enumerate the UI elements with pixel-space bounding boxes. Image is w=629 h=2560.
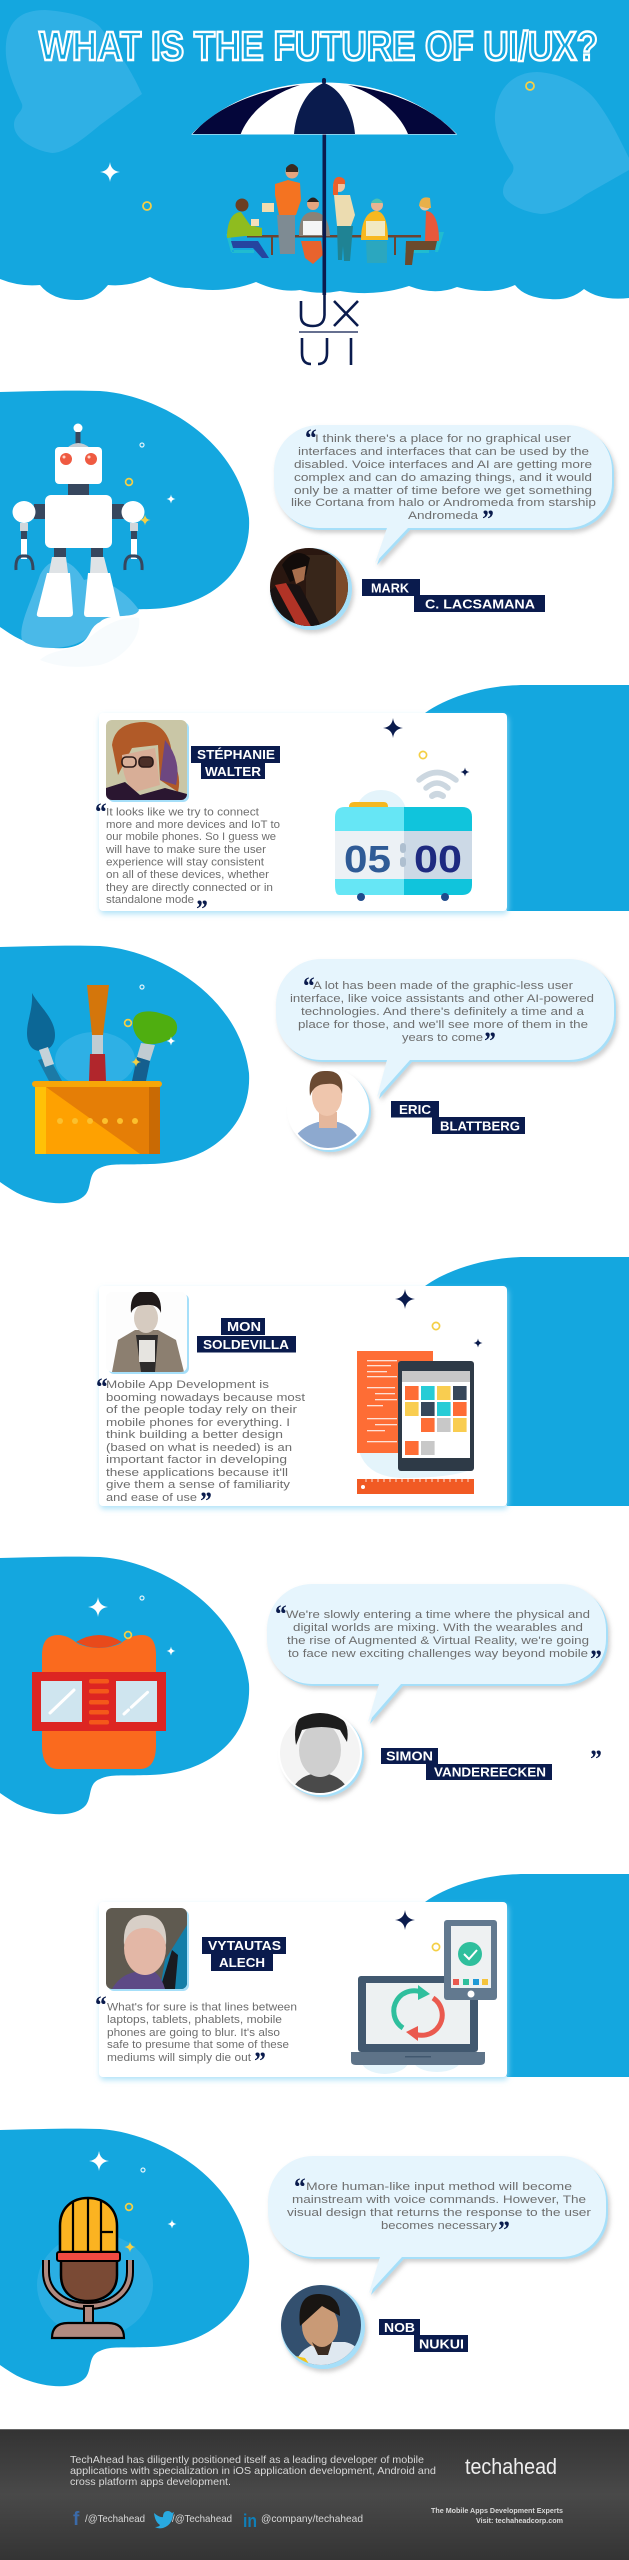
quote text: Mobile App Development is bbox=[106, 1379, 269, 1391]
name tag: NUKUI bbox=[419, 2336, 464, 2352]
quote text: What's for sure is that lines between bbox=[107, 2002, 297, 2014]
icon: alarm clock with wifi bbox=[335, 772, 472, 901]
quote text bbox=[95, 1374, 306, 1515]
icon: brushes in box bbox=[27, 985, 177, 1154]
portrait bbox=[281, 2285, 365, 2369]
name tag bbox=[191, 746, 280, 779]
logo: techahead: techahead bbox=[465, 2454, 557, 2479]
backdrop blob with light patch bbox=[0, 391, 249, 667]
person in red top bbox=[405, 197, 439, 265]
portrait bbox=[278, 1711, 364, 1797]
stray quote mark: ” bbox=[589, 1746, 602, 1773]
quote text: More human-like input method will become bbox=[306, 2181, 572, 2193]
quote text: experience will stay consistent bbox=[106, 856, 265, 868]
quote text: I think there's a place for no graphical user bbox=[315, 433, 571, 445]
name tag bbox=[197, 1318, 296, 1352]
person in yellow hoodie bbox=[361, 198, 388, 263]
quote text: will have to make sure the user bbox=[105, 844, 266, 856]
quote text: “ bbox=[302, 973, 315, 1000]
about text: applications with specialization in iOS application development, Android and bbox=[70, 2466, 436, 2477]
icon: umbrella bbox=[192, 78, 456, 295]
quote text: years to come bbox=[402, 1032, 483, 1044]
name tag bbox=[379, 2319, 468, 2352]
person at laptop bbox=[299, 198, 330, 264]
quote text: becomes necessary bbox=[381, 2220, 497, 2232]
name tag: C. LACSAMANA bbox=[425, 596, 536, 612]
quote text bbox=[291, 425, 596, 533]
panel: Vytautas Alech bbox=[94, 1874, 629, 2077]
person in orange standing bbox=[262, 164, 301, 254]
quote text: place for those, and we'll see more of them in the bbox=[298, 1019, 588, 1031]
quote text: give them a sense of familiarity bbox=[106, 1479, 290, 1491]
icon: laptop and phone sync bbox=[351, 1920, 497, 2074]
portrait bbox=[106, 1908, 189, 1991]
quote text: of the people today rely on their bbox=[106, 1404, 297, 1416]
quote text: interfaces and interfaces that can be used by the bbox=[298, 446, 589, 458]
icon: linkedin: in bbox=[243, 2511, 257, 2531]
person with red hair bbox=[333, 177, 355, 261]
quote text: to face new exciting challenges way beyond mobile bbox=[288, 1648, 588, 1660]
quote text: our mobile phones. So I guess we bbox=[106, 831, 276, 843]
icon: view-master headset bbox=[32, 1635, 166, 1769]
name tag: ALECH bbox=[219, 1955, 265, 1970]
quote text: on all of these devices, whether bbox=[106, 869, 269, 881]
backdrop bbox=[425, 1874, 629, 2077]
quote text: (based on what is needed) is an bbox=[106, 1442, 292, 1454]
portrait bbox=[268, 546, 352, 630]
quote text: and ease of use bbox=[106, 1492, 197, 1504]
card bbox=[99, 1902, 507, 2077]
quote text: standalone mode bbox=[106, 894, 194, 906]
quote text: ” bbox=[199, 1488, 212, 1515]
about text: TechAhead has diligently positioned itself as a leading developer of mobile bbox=[70, 2455, 424, 2466]
name tag bbox=[202, 1937, 286, 1971]
quote text: they are directly connected or in bbox=[106, 882, 273, 894]
quote text: think building a better design bbox=[106, 1429, 283, 1441]
quote text: complex and can do amazing things, and it would bbox=[294, 472, 592, 484]
name tag: NOB bbox=[384, 2320, 415, 2335]
quote text: phones are going to blur. It's also bbox=[107, 2027, 280, 2039]
speech bubble bbox=[274, 425, 614, 565]
name tag bbox=[391, 1101, 525, 1134]
quote text: “ bbox=[274, 1601, 287, 1628]
quote text: visual design that returns the response to the user bbox=[287, 2207, 591, 2219]
quote text: laptops, tablets, phablets, mobile bbox=[107, 2014, 282, 2026]
quote text: the rise of Augmented & Virtual Reality, we're going bbox=[287, 1635, 589, 1647]
quote text: digital worlds are mixing. With the wearables and bbox=[293, 1622, 583, 1634]
name tag: SIMON bbox=[386, 1748, 433, 1764]
icon: sparkles bbox=[395, 1289, 482, 1348]
name tag: STÉPHANIE bbox=[197, 747, 275, 762]
quote text bbox=[274, 1601, 602, 1673]
panel: Stéphanie Walter bbox=[94, 685, 629, 923]
about text: cross platform apps development. bbox=[70, 2477, 231, 2488]
icon: sparkles bbox=[89, 2151, 176, 2252]
quote text: ” bbox=[497, 2217, 510, 2244]
name tag: VANDEREECKEN bbox=[434, 1764, 546, 1780]
about text bbox=[70, 2455, 436, 2488]
social links: /@Techahead bbox=[172, 2514, 232, 2525]
quote text: important factor in developing bbox=[106, 1454, 287, 1466]
name tag: MON bbox=[227, 1319, 261, 1334]
quote text: only be a matter of time before we get something bbox=[294, 485, 592, 497]
speech bubble bbox=[276, 959, 616, 1099]
quote text: “ bbox=[304, 425, 317, 452]
quote text: disabled. Voice interfaces and AI are getting more bbox=[294, 459, 592, 471]
tagline: Visit: techaheadcorp.com bbox=[476, 2516, 563, 2525]
name tag: BLATTBERG bbox=[440, 1118, 520, 1134]
quote text: mainstream with voice commands. However, The bbox=[292, 2194, 586, 2206]
name tag: WALTER bbox=[205, 764, 262, 779]
header background with cloud edge bbox=[0, 0, 629, 300]
panel: Nob Nukui bbox=[0, 2129, 608, 2386]
quote text: A lot has been made of the graphic-less user bbox=[313, 980, 573, 992]
portrait bbox=[287, 1068, 371, 1152]
quote text: these applications because it'll bbox=[106, 1467, 288, 1479]
quote text bbox=[94, 1992, 297, 2075]
quote text: “ bbox=[95, 1374, 108, 1401]
panel: Mon Soldevilla bbox=[95, 1257, 629, 1515]
quote text: booming nowadays because most bbox=[106, 1392, 306, 1404]
panel: Mark C. Lacsamana bbox=[0, 391, 614, 667]
quote text bbox=[94, 799, 280, 923]
quote text: more and more devices and IoT to bbox=[106, 819, 280, 831]
quote text: mobile phones for everything. I bbox=[106, 1417, 290, 1429]
quote text bbox=[290, 973, 594, 1055]
quote text: ” bbox=[253, 2048, 266, 2075]
icon: facebook: f bbox=[73, 2509, 80, 2530]
quote text: We're slowly entering a time where the physical and bbox=[286, 1609, 590, 1621]
quote text: ” bbox=[481, 506, 494, 533]
icon: sparkles bbox=[383, 718, 470, 776]
name tag: ERIC bbox=[399, 1102, 432, 1117]
icon: alarm clock with wifi: 00 bbox=[414, 839, 462, 881]
quote text: mediums will simply die out bbox=[107, 2052, 252, 2064]
portrait bbox=[106, 1291, 189, 1374]
icon: sparkles bbox=[126, 443, 176, 526]
backdrop blob bbox=[0, 1557, 249, 1814]
tagline bbox=[431, 2506, 563, 2525]
backdrop blob bbox=[0, 946, 249, 1203]
quote text: ” bbox=[589, 1646, 602, 1673]
name tag: MARK bbox=[371, 580, 410, 596]
quote text: like Cortana from halo or Andromeda from starship bbox=[291, 497, 596, 509]
icon: robot bbox=[12, 424, 144, 617]
name tag: SOLDEVILLA bbox=[203, 1337, 290, 1352]
quote text: It looks like we try to connect bbox=[106, 806, 260, 818]
icon: code sheet and tablet bbox=[357, 1351, 474, 1494]
icon: header sparkles and rings bbox=[100, 82, 534, 210]
icon: microphone bbox=[37, 2198, 153, 2338]
icon: alarm clock with wifi: 05 bbox=[344, 839, 391, 881]
quote text: ” bbox=[195, 896, 208, 923]
tagline: The Mobile Apps Development Experts bbox=[431, 2506, 563, 2515]
social links: /@Techahead bbox=[85, 2514, 145, 2525]
footer bbox=[0, 2429, 629, 2560]
name tag bbox=[362, 579, 545, 612]
social links: @company/techahead bbox=[261, 2514, 363, 2525]
icon: sparkles bbox=[395, 1910, 440, 1951]
logo: UX over UI bbox=[299, 290, 358, 365]
quote text: interface, like voice assistants and other AI-powered bbox=[290, 993, 594, 1005]
quote text bbox=[287, 2174, 591, 2244]
illustration: team working at table bbox=[226, 164, 444, 265]
name tag bbox=[381, 1748, 552, 1780]
decorative header blobs bbox=[6, 10, 629, 214]
backdrop bbox=[425, 1257, 629, 1506]
backdrop blob bbox=[0, 2129, 249, 2386]
icon: sparkles bbox=[125, 985, 176, 1067]
quote text: technologies. And there's definitely a time and a bbox=[301, 1006, 585, 1018]
card bbox=[99, 1286, 507, 1506]
card bbox=[99, 713, 507, 911]
social links bbox=[73, 2509, 363, 2531]
quote text: “ bbox=[94, 1992, 107, 2019]
quote text: ” bbox=[483, 1028, 496, 1055]
name tag: VYTAUTAS bbox=[208, 1938, 281, 1953]
speech bubble bbox=[267, 1584, 608, 1724]
quote text: “ bbox=[94, 799, 107, 826]
backdrop bbox=[425, 685, 629, 911]
quote text: “ bbox=[293, 2174, 306, 2201]
speech bubble bbox=[268, 2156, 608, 2295]
person in green bbox=[227, 198, 269, 258]
portrait bbox=[106, 720, 189, 802]
quote text: Andromeda bbox=[408, 510, 479, 522]
icon: sparkles bbox=[88, 1596, 176, 1656]
panel: Eric Blattberg bbox=[0, 946, 616, 1203]
icon: twitter bbox=[154, 2511, 174, 2528]
panel: Simon Vandereecken bbox=[0, 1557, 608, 1814]
quote text: safe to presume that some of these bbox=[107, 2039, 289, 2051]
